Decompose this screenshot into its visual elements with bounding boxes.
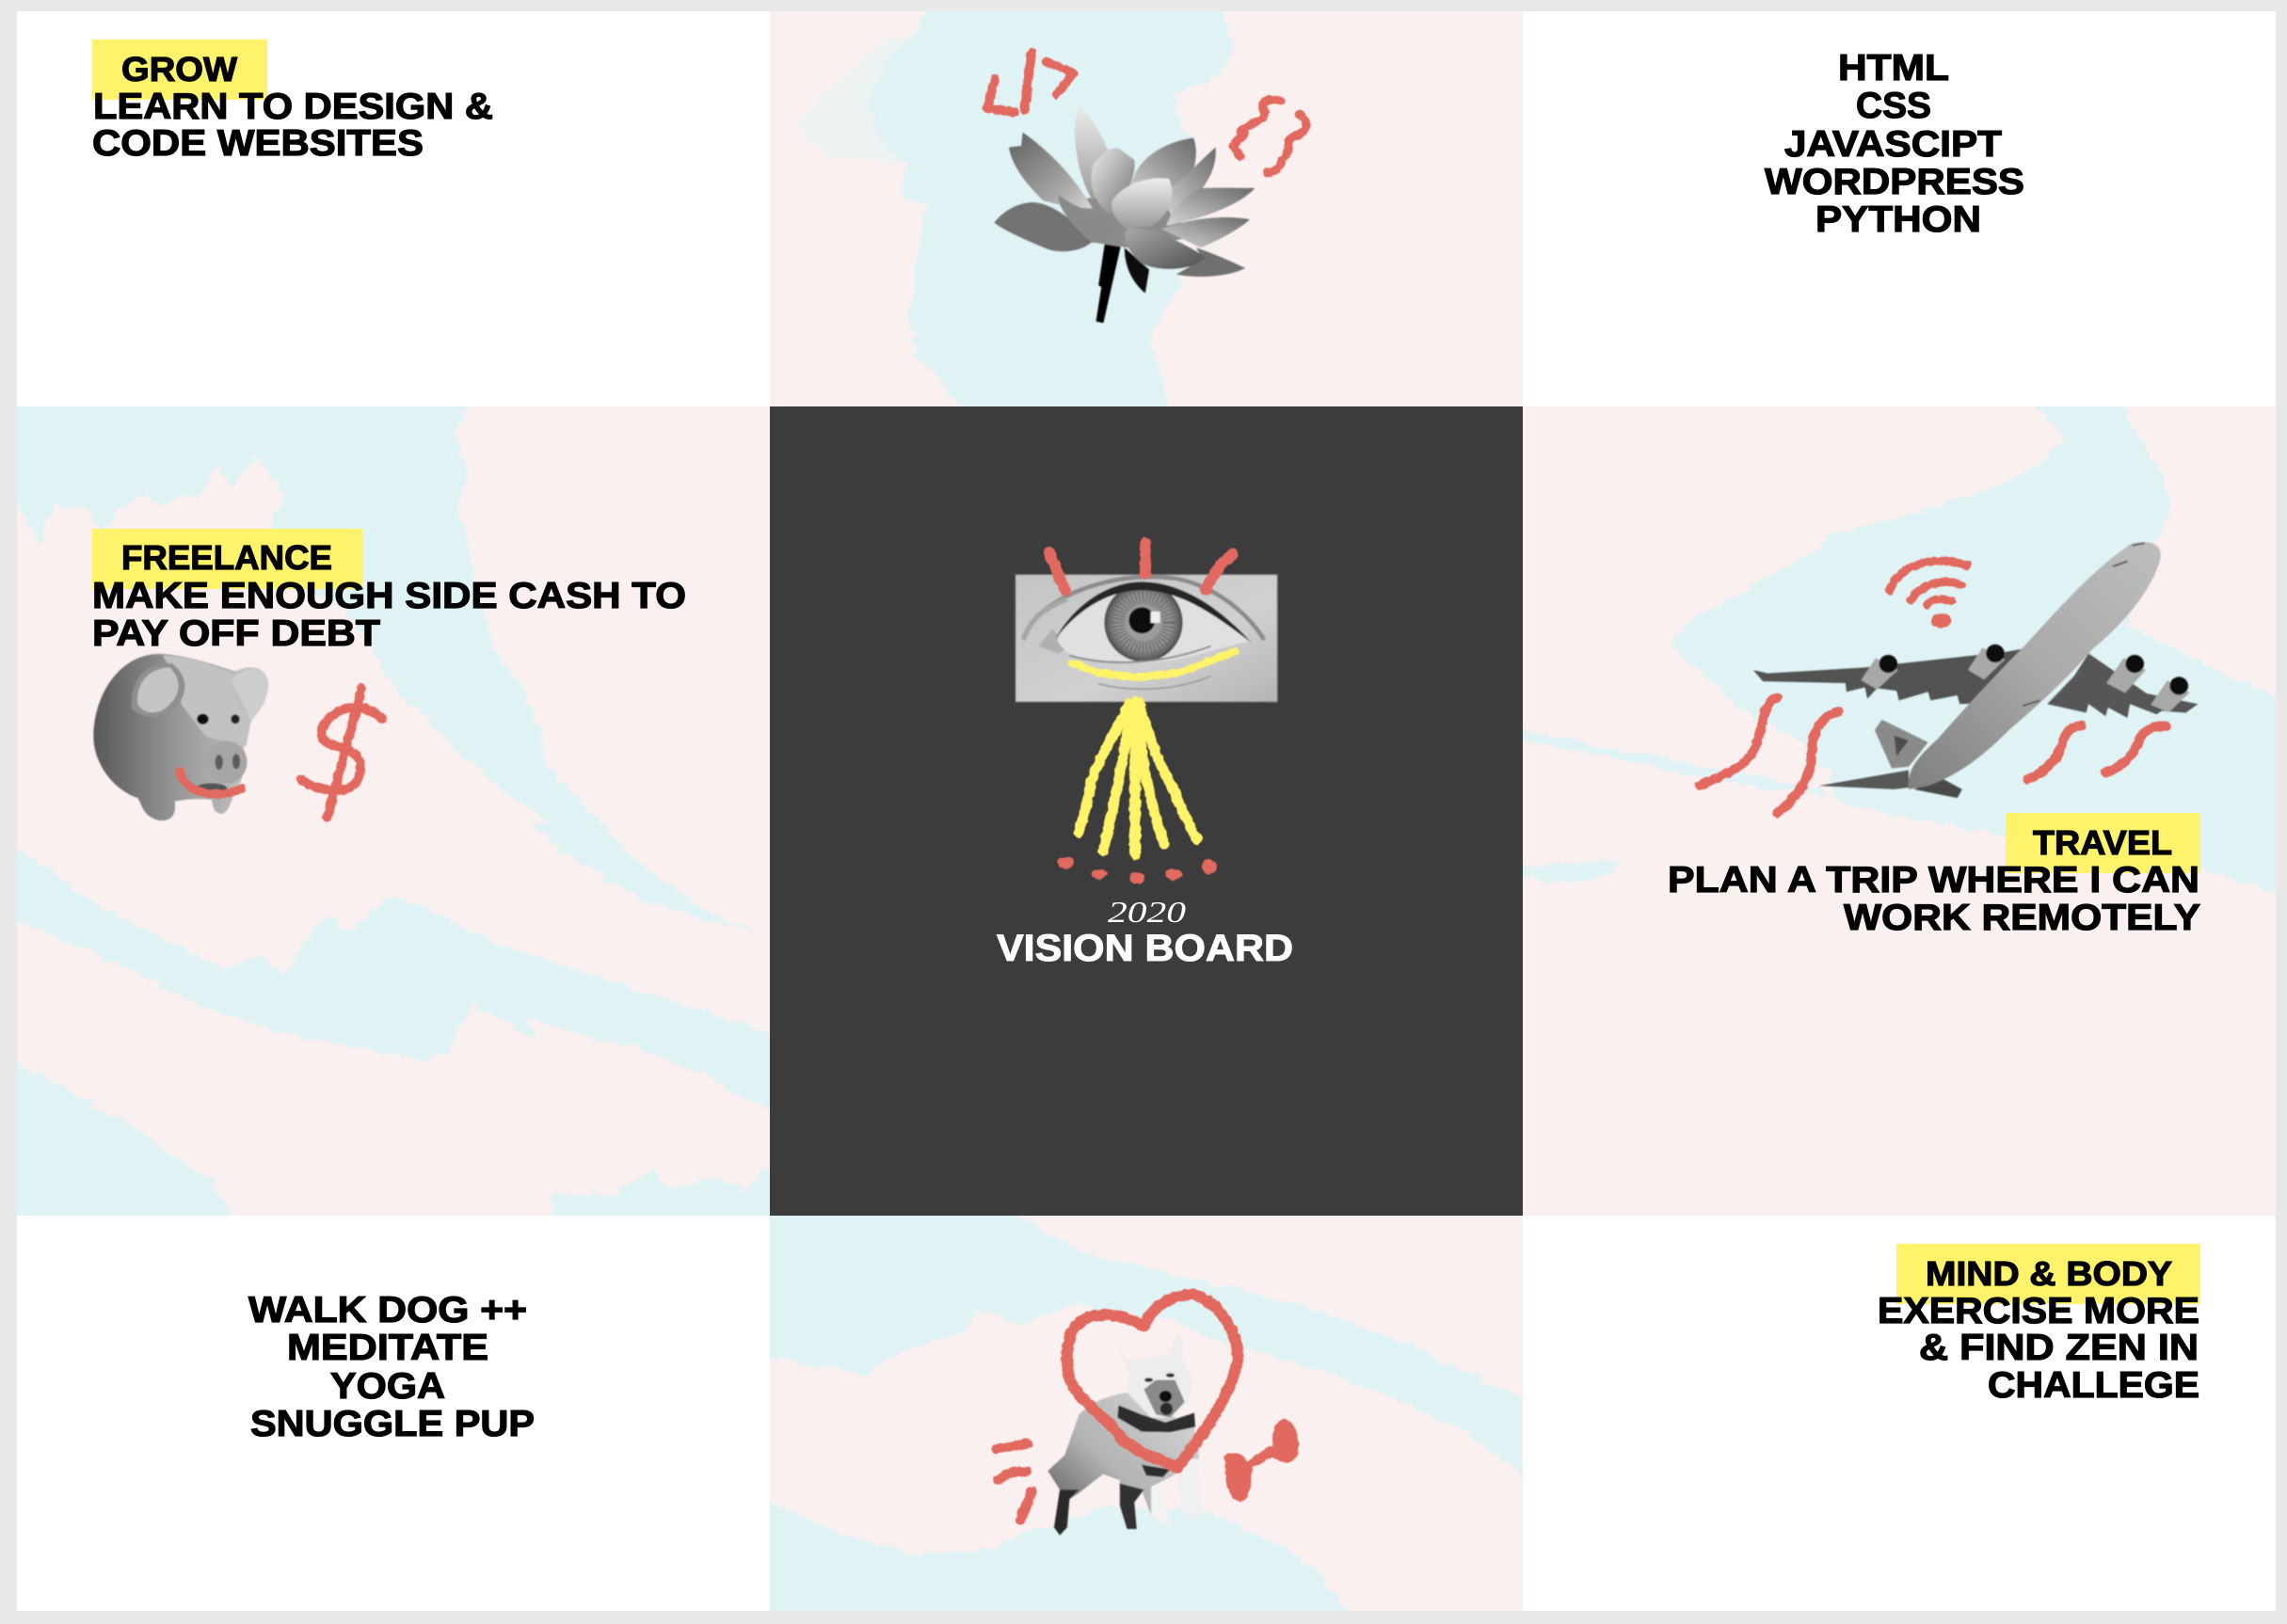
icon: coral dots bbox=[1057, 857, 1217, 884]
panel: travel bbox=[1520, 401, 2287, 1216]
label highlight: travel bbox=[2006, 813, 2200, 873]
text block: learn to design bbox=[92, 87, 493, 164]
panel: lotus illustration bbox=[770, 3, 1523, 414]
text block: wellness list bbox=[248, 1290, 535, 1444]
icon: code symbols bbox=[986, 53, 1306, 172]
text block: skills: PYTHON bbox=[1815, 199, 1981, 240]
text block: plan a trip: WORK REMOTELY bbox=[1844, 898, 2200, 938]
icon: running dog bbox=[1048, 1334, 1202, 1536]
text block: skills: CSS bbox=[1856, 86, 1931, 126]
text block: side cash: MAKE ENOUGH SIDE CASH TO bbox=[92, 576, 686, 616]
icon: piggy bank bbox=[93, 654, 268, 820]
heading: travel: TRAVEL bbox=[2033, 823, 2172, 862]
title: vision board: VISION BOARD bbox=[997, 928, 1293, 969]
text block: exercise: CHALLEGE bbox=[1988, 1365, 2199, 1406]
label highlight: grow bbox=[92, 40, 267, 100]
text block: plan a trip bbox=[1668, 860, 2200, 938]
label highlight: freelance bbox=[92, 529, 362, 589]
heading: freelance: FREELANCE bbox=[121, 538, 332, 577]
icon: wifi and exhaust squiggles bbox=[1700, 561, 2167, 814]
icon: lotus flower bbox=[994, 105, 1255, 323]
text block: learn to design: CODE WEBSITES bbox=[92, 123, 424, 164]
text block: exercise bbox=[1878, 1291, 2199, 1406]
text block: learn to design: LEARN TO DESIGN & bbox=[93, 87, 493, 127]
heading: mind and body: MIND & BODY bbox=[1926, 1254, 2172, 1293]
panel: dog illustration bbox=[762, 1211, 1535, 1618]
text block: skills bbox=[1765, 48, 2024, 240]
heading: grow: GROW bbox=[121, 50, 238, 88]
icon: eye accent rays bbox=[1049, 543, 1233, 591]
title: 2020: 2020 bbox=[1108, 895, 1186, 929]
panel: grow bbox=[17, 11, 770, 406]
text block: side cash: PAY OFF DEBT bbox=[92, 613, 381, 654]
panel: freelance bbox=[0, 402, 787, 1223]
panel: mind and body bbox=[1523, 1216, 2276, 1611]
text block: skills: JAVASCIPT bbox=[1784, 124, 2003, 165]
text block: exercise: EXERCISE MORE bbox=[1878, 1291, 2199, 1331]
icon: eye photo bbox=[1016, 575, 1277, 702]
text block: exercise: & FIND ZEN IN bbox=[1919, 1328, 2199, 1368]
text block: plan a trip: PLAN A TRIP WHERE I CAN bbox=[1668, 860, 2199, 900]
panel: vision board centre bbox=[770, 406, 1523, 1216]
text block: skills: HTML bbox=[1838, 48, 1949, 88]
text block: side cash bbox=[92, 576, 686, 654]
text block: skills: WORDPRESS bbox=[1765, 162, 2024, 202]
text block: wellness list: YOGA bbox=[330, 1366, 445, 1407]
panel: coding skills list bbox=[1523, 11, 2276, 406]
text block: wellness list: MEDITATE bbox=[287, 1328, 488, 1368]
brush stroke background bbox=[1520, 401, 2287, 896]
icon: airplane bbox=[1753, 542, 2198, 798]
brush stroke background bbox=[0, 402, 787, 1223]
brush stroke background bbox=[762, 1211, 1535, 1618]
icon: yellow lash and light beams bbox=[1072, 651, 1236, 854]
panel: walk dog list bbox=[17, 1216, 770, 1611]
icon: dollar sign and pig smile bbox=[180, 689, 381, 817]
label highlight: mind and body bbox=[1896, 1244, 2200, 1304]
brush stroke background bbox=[797, 3, 1233, 414]
text block: wellness list: WALK DOG ++ bbox=[248, 1290, 527, 1330]
text block: wellness list: SNUGGLE PUP bbox=[250, 1404, 535, 1444]
icon: heart and dumbbell bbox=[997, 1295, 1299, 1520]
